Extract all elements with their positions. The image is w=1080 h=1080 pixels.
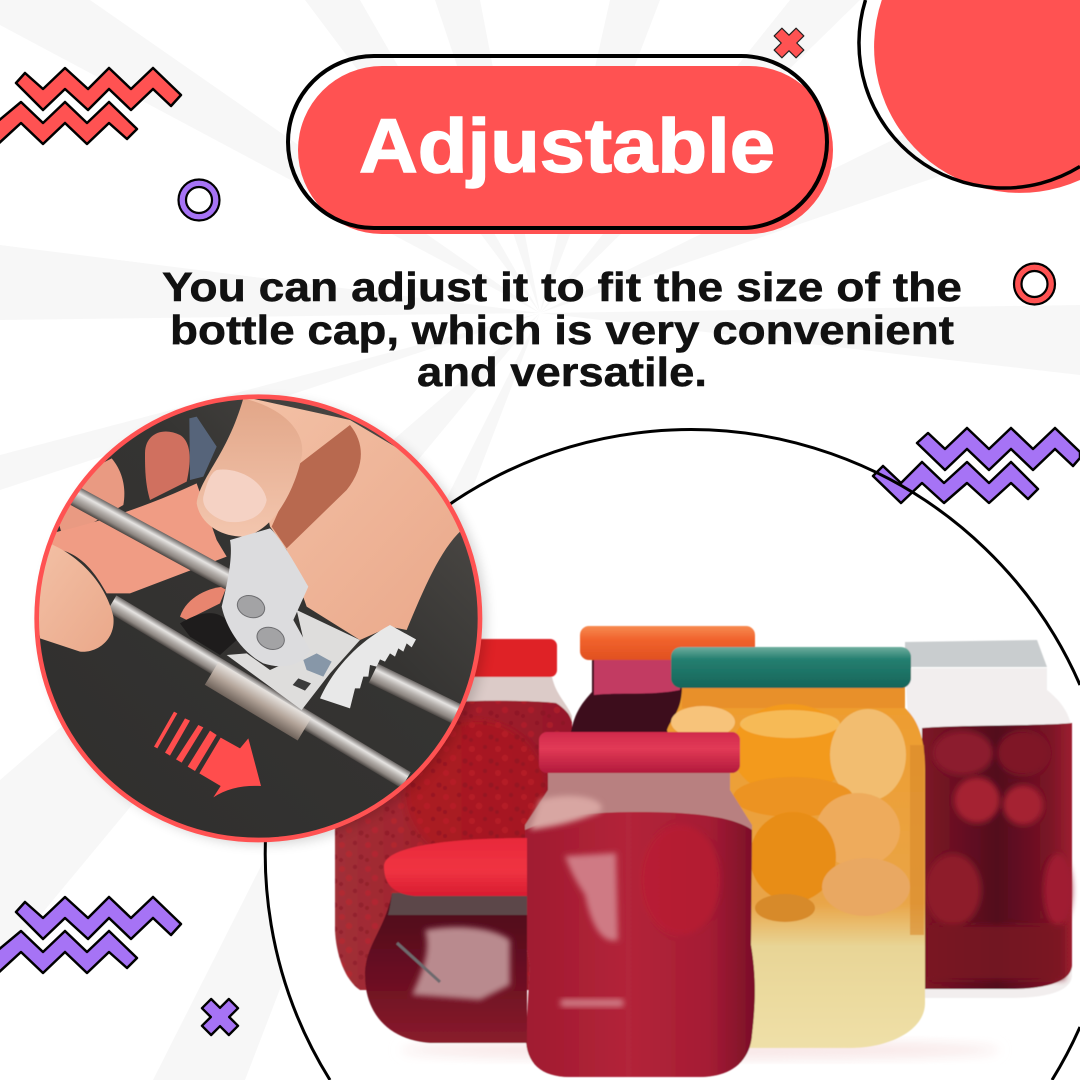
inset ring [37, 397, 480, 840]
title: Adjustable [359, 104, 775, 189]
decoration: purple zigzag bottom left [0, 897, 181, 974]
description text: bottle cap, which is very convenient [170, 307, 954, 353]
jar: front small [365, 838, 527, 1043]
lid: green [671, 647, 911, 688]
jar: back left raspberry [335, 639, 572, 990]
left thumb [39, 544, 114, 652]
decoration: purple ring [178, 180, 220, 220]
description text [162, 264, 962, 395]
body plate [227, 610, 360, 710]
decoration: purple cross [193, 990, 247, 1044]
decoration: large red circle top right [859, 0, 1080, 193]
jars photo [335, 626, 1072, 1077]
decoration: red cross [767, 21, 811, 65]
back finger [145, 431, 190, 500]
description text: You can adjust it to fit the size of the [162, 264, 962, 310]
upper bar [70, 487, 235, 589]
small finger [180, 587, 227, 620]
square detail [293, 678, 311, 691]
thumbnail [203, 469, 267, 522]
decoration: red zigzag top left [0, 68, 181, 145]
head plate [222, 528, 310, 666]
decoration: red ring right [1014, 264, 1055, 304]
jaw [180, 613, 237, 655]
hand shadow [272, 425, 361, 548]
large circle background [265, 430, 1080, 1080]
rivets [236, 595, 285, 650]
right hand [243, 397, 462, 640]
jar: peach [667, 647, 925, 1048]
sleeve [205, 662, 311, 741]
jar: right cherry [905, 640, 1072, 998]
decoration: purple zigzag right [873, 428, 1080, 503]
inset shadow [42, 400, 486, 844]
large circle outline [265, 430, 1080, 1080]
inset photo: hand using can opener [30, 390, 490, 850]
thumb [197, 398, 302, 537]
slider detail [303, 653, 332, 677]
upper left finger [60, 458, 124, 531]
description text: and versatile. [417, 349, 707, 395]
right bar [369, 664, 465, 725]
middle finger [37, 483, 227, 593]
jar: front red [525, 732, 755, 1077]
jar: back center dark [571, 626, 755, 732]
lower bar [107, 595, 411, 788]
serrated blade [320, 625, 416, 708]
arrow [154, 712, 261, 797]
title badge [288, 56, 833, 234]
back metal piece [189, 417, 217, 480]
